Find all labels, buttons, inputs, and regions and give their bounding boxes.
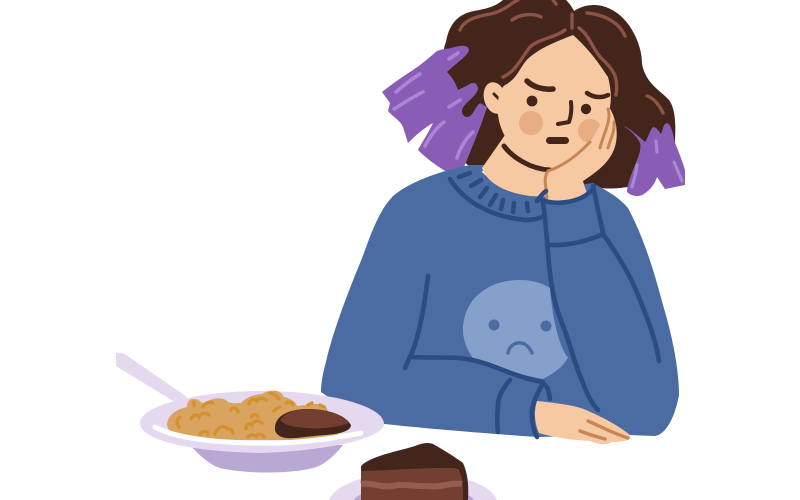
smiley on sweater <box>460 280 583 383</box>
rice <box>167 391 340 440</box>
ear <box>480 80 510 116</box>
hair strand highlights <box>460 0 663 113</box>
raised arm inner edge <box>543 203 598 410</box>
raised arm cuff <box>537 186 594 203</box>
eyes <box>527 96 537 106</box>
plate <box>329 472 497 500</box>
spoon <box>116 353 187 404</box>
cheeks <box>519 111 543 135</box>
rice bowl <box>140 391 384 472</box>
jaw line <box>504 146 550 170</box>
cake top icing <box>361 443 468 500</box>
sweater body <box>321 165 679 437</box>
rice grain squiggles <box>177 393 324 437</box>
hand on cheek <box>545 106 617 201</box>
meat patty <box>275 409 351 438</box>
eyebrows <box>527 81 553 89</box>
raised arm outer edge <box>603 234 659 361</box>
cream layer <box>361 484 462 486</box>
collar <box>450 179 542 220</box>
resting arm <box>410 357 543 382</box>
torso side <box>405 276 428 368</box>
bowl base <box>190 445 343 472</box>
bowl rim <box>140 391 384 453</box>
hair: right purple strand <box>623 123 685 196</box>
cake slice on plate <box>329 443 497 500</box>
cake body <box>361 464 468 500</box>
resting cuff <box>497 380 510 432</box>
mouth <box>546 137 569 144</box>
re-stroked seams above smiley <box>460 293 583 383</box>
face <box>498 35 611 170</box>
resting hand <box>535 401 630 444</box>
nose <box>558 102 571 124</box>
hair: dark brown mass <box>443 0 675 188</box>
sweater seams and collar <box>405 173 659 437</box>
hair: left purple strand <box>382 46 487 175</box>
rim highlight <box>155 427 361 443</box>
neck <box>482 135 560 197</box>
